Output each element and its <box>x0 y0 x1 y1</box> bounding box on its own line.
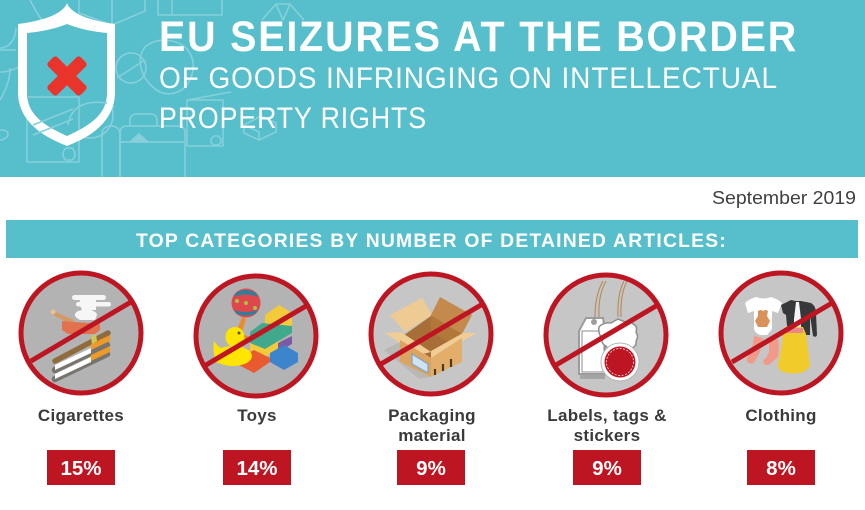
subtitle: PROPERTY RIGHTS <box>159 102 427 135</box>
value: labels, tags and stickers 9%: 9% <box>592 457 622 480</box>
value: toys 14% <box>223 450 291 485</box>
section heading banner: TOP CATEGORIES BY NUMBER OF DETAINED ARTICLES: <box>136 231 727 252</box>
title: EU SEIZURES AT THE BORDER <box>159 13 798 61</box>
icon: cigarettes prohibited <box>21 273 141 393</box>
icon: clothing prohibited <box>721 273 841 393</box>
category labels: Labels, tags & <box>547 406 667 425</box>
value: labels, tags and stickers 9% <box>573 450 641 485</box>
category labels: stickers <box>574 426 640 445</box>
icon: packaging material prohibited <box>371 274 491 394</box>
value: packaging material 9% <box>397 450 465 485</box>
category labels: Toys <box>237 406 277 425</box>
value: packaging material 9%: 9% <box>416 457 446 480</box>
header band <box>0 0 865 186</box>
category labels: material <box>398 426 466 445</box>
date: September 2019 <box>712 188 856 208</box>
value: clothing 8% <box>747 450 815 485</box>
value: toys 14%: 14% <box>236 457 278 480</box>
category labels: Clothing <box>745 406 817 425</box>
value: cigarettes 15%: 15% <box>60 457 102 480</box>
subtitle <box>159 62 778 135</box>
subtitle: OF GOODS INFRINGING ON INTELLECTUAL <box>159 62 778 95</box>
category labels: Packaging <box>388 406 476 425</box>
icon: labels, tags and stickers prohibited <box>546 275 666 395</box>
icon: toys prohibited <box>196 276 316 396</box>
category labels: Cigarettes <box>38 406 124 425</box>
section heading banner <box>6 220 858 258</box>
category labels <box>38 406 817 445</box>
icon: shield with red cross <box>18 3 115 146</box>
value: cigarettes 15% <box>47 450 115 485</box>
value: clothing 8%: 8% <box>766 457 796 480</box>
